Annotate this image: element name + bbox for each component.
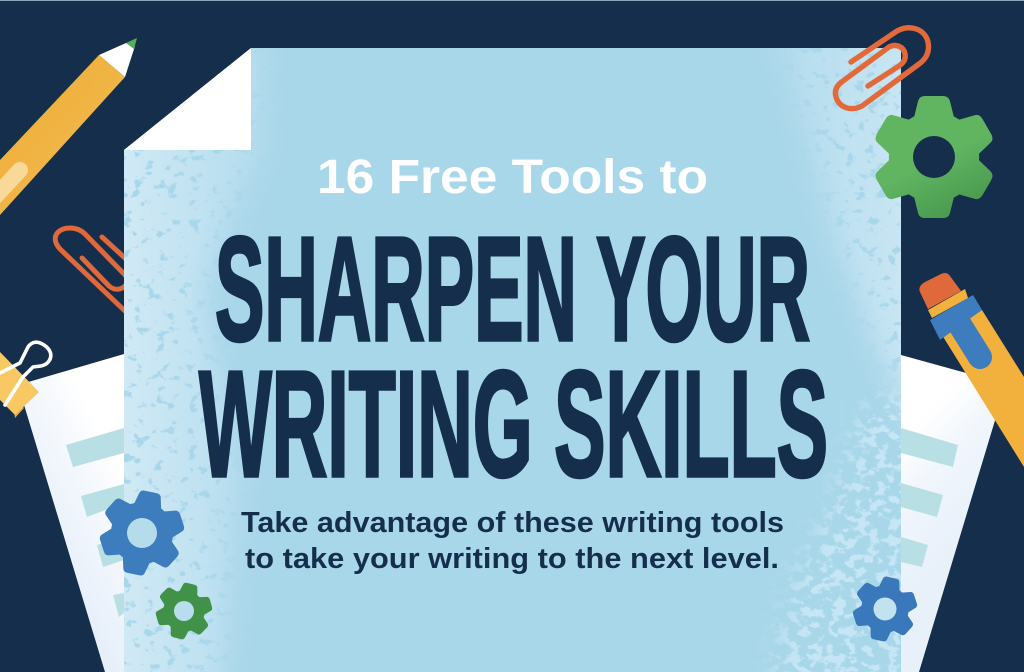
gear: large green: [871, 96, 997, 218]
pencil highlight: [0, 170, 20, 198]
gear: small green: [149, 577, 219, 645]
pencil: top left: [0, 38, 137, 215]
paper right wash: [788, 48, 901, 402]
gear hole: [174, 601, 194, 621]
gear: left blue: [91, 483, 193, 583]
pencil body: [0, 55, 125, 215]
pencil collar: [930, 295, 982, 340]
pencil body: [942, 310, 1024, 467]
back sheet: left: [18, 354, 124, 672]
clip body: [0, 352, 39, 415]
pencil tip: [99, 43, 135, 77]
back sheet: right: [901, 355, 1006, 672]
heading: 16 Free Tools to: 16 Free Tools to: [317, 151, 708, 204]
top edge line: [0, 0, 1024, 1]
gear hole: [127, 518, 157, 548]
gear hole: [874, 598, 896, 620]
gear: right blue: [846, 571, 924, 647]
subtitle: [241, 507, 784, 575]
paper lower right speckle: [768, 389, 901, 672]
clip handle: [0, 342, 51, 405]
left sheet text bars: [66, 428, 124, 617]
paperclip: left: [55, 228, 126, 312]
clip back: [0, 385, 24, 418]
paper left wash: [124, 48, 260, 672]
paper left speckle: [124, 92, 254, 672]
paper right speckle: [798, 48, 901, 372]
pencil eraser: [919, 273, 961, 309]
gear hole: [913, 136, 955, 178]
pencil: right: [919, 273, 1024, 467]
gear shading: [886, 156, 992, 218]
pencil lead: [126, 38, 137, 49]
subtitle: to take your writing to the next level.: [245, 543, 779, 575]
right sheet text bars: [901, 428, 958, 567]
main paper: [124, 48, 901, 672]
paperclip: top right: [835, 28, 929, 109]
subtitle: Take advantage of these writing tools: [241, 507, 784, 539]
paper fold: [124, 48, 251, 150]
pencil clip: [960, 325, 980, 357]
pencil band: [928, 289, 968, 318]
binder clip: [0, 342, 51, 418]
